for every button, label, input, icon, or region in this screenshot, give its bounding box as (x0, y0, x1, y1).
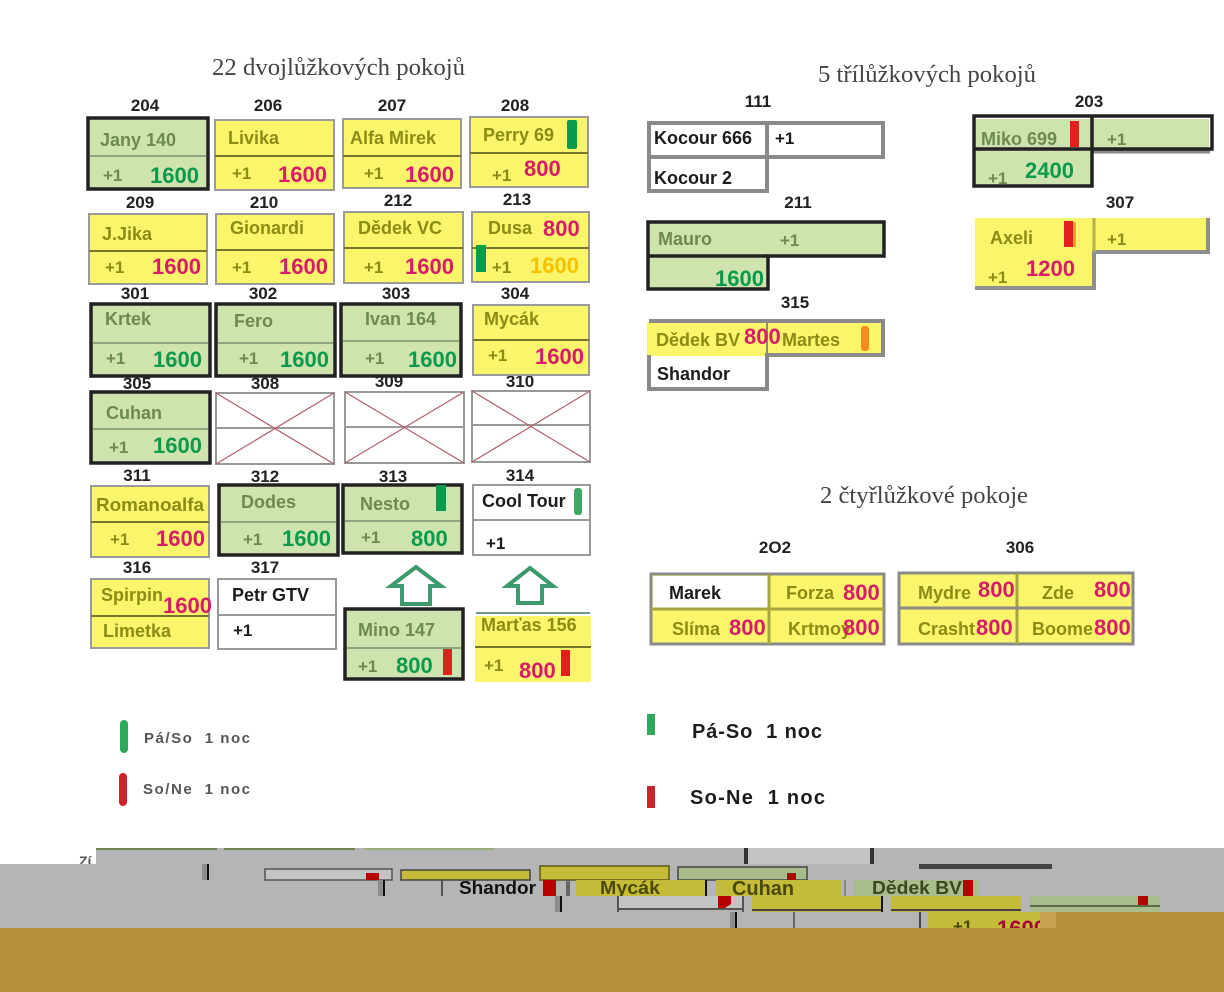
room numbers of triple rooms: 211 (784, 193, 812, 212)
room Mino 147: +1 (358, 657, 377, 676)
room 306: 800 (978, 577, 1015, 602)
legend: right: So-Ne 1 noc (690, 787, 825, 809)
room Marťas 156: +1 (484, 656, 503, 675)
title: 22 double rooms: 22 dvojlůžkových pokojů (212, 55, 465, 81)
fragment: strip row 3 with names: Cuhan (732, 878, 794, 900)
room 204: 1600 (150, 163, 199, 188)
room 311 (91, 486, 209, 557)
room 310 crossed out (472, 391, 590, 462)
fragment: strip row 4 (555, 896, 1160, 912)
room 307: +1 (988, 268, 1007, 287)
room 306: Crasht (918, 619, 975, 639)
room numbers of double rooms: 317 (251, 558, 279, 577)
room 204: +1 (103, 166, 122, 185)
room 301: +1 (106, 349, 125, 368)
room numbers of double rooms: 304 (501, 284, 530, 303)
room 111: Kocour 2 (654, 168, 732, 188)
room 306: Zde (1042, 583, 1074, 603)
room numbers of double rooms: 309 (375, 372, 403, 391)
room 306: 800 (976, 615, 1013, 640)
room 303: Ivan 164 (365, 309, 436, 329)
room 308 crossed out (216, 393, 334, 464)
room 213 (472, 212, 589, 282)
room 313 (343, 485, 462, 553)
legend: left (119, 720, 250, 806)
room numbers of double rooms: 303 (382, 284, 410, 303)
room 206: 1600 (278, 162, 327, 187)
fragment: strip row 5 (730, 912, 1040, 928)
room 203: 2400 (1025, 158, 1074, 183)
room 303 (341, 304, 461, 376)
room numbers of double rooms: 311 (123, 466, 151, 485)
title: 2 quadruple rooms: 2 čtyřlůžkové pokoje (820, 483, 1028, 509)
room 210: Gionardi (230, 218, 304, 238)
room 304: Mycák (484, 309, 540, 329)
room numbers of double rooms: 305 (123, 374, 151, 393)
room numbers of double rooms: 208 (501, 96, 529, 115)
room 316: Limetka (103, 621, 172, 641)
room Marťas 156: 800 (519, 658, 556, 683)
legend: left: So/Ne 1 noc (143, 781, 250, 798)
fragment: lighter gold patch (1040, 912, 1056, 928)
room 213: Dusa (488, 218, 533, 238)
room 305: 1600 (153, 433, 202, 458)
room numbers of triple rooms: 111 (745, 92, 771, 111)
room 304 (473, 305, 589, 375)
room numbers of double rooms: 212 (384, 191, 412, 210)
room 302: Fero (234, 311, 273, 331)
room 210: 1600 (279, 254, 328, 279)
room 202 (651, 574, 884, 644)
room 301: Krtek (105, 309, 152, 329)
arrow: Marťas up to 314 (507, 568, 553, 603)
room 307: Axeli (990, 228, 1033, 248)
room 213: +1 (492, 258, 511, 277)
room numbers of triple rooms: 315 (781, 293, 809, 312)
room numbers of double rooms: 302 (249, 284, 277, 303)
room 203: Miko 699 (981, 129, 1057, 149)
room 317: Petr GTV (232, 585, 309, 605)
room 209 (89, 214, 207, 284)
room 206: Livika (228, 128, 280, 148)
room 202: Slíma (672, 619, 721, 639)
room 211: +1 (780, 231, 799, 250)
legend: right: Pá-So 1 noc (692, 721, 822, 743)
band: gray footer strip with scrambled screenshot fragments (0, 848, 1224, 928)
room 202: 800 (729, 615, 766, 640)
room 312: +1 (243, 530, 262, 549)
room 203: +1 (1107, 130, 1126, 149)
room 211 (648, 222, 884, 291)
room 317 (218, 579, 336, 649)
room 204: Jany 140 (100, 130, 176, 150)
room numbers of quadruple rooms (759, 538, 1034, 557)
room 202: Marek (669, 583, 722, 603)
room 316 (91, 579, 212, 648)
room 207: 1600 (405, 162, 454, 187)
room 202: Forza (786, 583, 835, 603)
room 313: +1 (361, 528, 380, 547)
room 316: 1600 (163, 593, 212, 618)
band: gold footer (0, 912, 1224, 992)
room 202: Krtmoy (788, 619, 851, 639)
room 212: Dědek VC (358, 218, 442, 238)
room 111: Kocour 666 (654, 128, 752, 148)
room 203 (974, 116, 1212, 188)
room 302 (216, 304, 335, 376)
room numbers of quadruple rooms: 306 (1006, 538, 1034, 557)
room 305 (91, 392, 210, 463)
room 208: 800 (524, 156, 561, 181)
room 315: Dědek BV (656, 330, 740, 350)
room numbers of double rooms: 310 (506, 372, 534, 391)
room 305: +1 (109, 438, 128, 457)
room 208 (470, 117, 588, 187)
title: 5 triple rooms: 5 třílůžkových pokojů (818, 62, 1036, 88)
room Marťas 156: Marťas 156 (481, 615, 577, 635)
room 208: Perry 69 (483, 125, 554, 145)
fragment: strip row 5: +1 (953, 917, 972, 936)
room 111 (649, 123, 883, 191)
room 210 (216, 214, 334, 284)
room 306: 800 (1094, 615, 1131, 640)
arrow: Mino up to 313 (391, 567, 441, 604)
room 315: Shandor (657, 364, 730, 384)
room 315: Martes (782, 330, 840, 350)
room 315: 800 (744, 324, 781, 349)
legend: right (647, 714, 825, 809)
room 213: 1600 (530, 253, 579, 278)
room numbers of triple rooms (745, 92, 1134, 312)
room 314: +1 (486, 534, 505, 553)
room numbers of quadruple rooms: 2O2 (759, 538, 791, 557)
room numbers of double rooms: 207 (378, 96, 406, 115)
room 212 (344, 212, 463, 283)
room 317: +1 (233, 621, 252, 640)
room 302: 1600 (280, 347, 329, 372)
room numbers of double rooms: 210 (250, 193, 278, 212)
room 211: Mauro (658, 229, 712, 249)
room 206 (215, 120, 334, 190)
room numbers of triple rooms: 307 (1106, 193, 1134, 212)
room numbers of double rooms: 312 (251, 467, 279, 486)
room 206: +1 (232, 164, 251, 183)
room 207 (343, 119, 461, 188)
room 306: Mydre (918, 583, 971, 603)
room 301 (91, 304, 210, 376)
room 306: Boome (1032, 619, 1093, 639)
room 307 (975, 218, 1208, 288)
legend: left: Pá/So 1 noc (144, 730, 250, 747)
fragment: strip row 5: 1600 (997, 916, 1046, 941)
room numbers of double rooms: 213 (503, 190, 531, 209)
text fragment above footer: Zí (79, 853, 93, 869)
room 314: Cool Tour (482, 491, 566, 511)
room Mino 147: Mino 147 (358, 620, 435, 640)
room 301: 1600 (153, 347, 202, 372)
room 208: +1 (492, 166, 511, 185)
room numbers of double rooms (121, 96, 535, 577)
room 307: 1200 (1026, 256, 1075, 281)
room Mino 147: 800 (396, 653, 433, 678)
room 309 crossed out (345, 392, 464, 463)
room 307: +1 (1107, 230, 1126, 249)
room 211: 1600 (715, 266, 764, 291)
room 306 (899, 573, 1133, 644)
room 210: +1 (232, 258, 251, 277)
room 312: 1600 (282, 526, 331, 551)
room numbers of double rooms: 316 (123, 558, 151, 577)
room numbers of double rooms: 204 (131, 96, 160, 115)
room 302: +1 (239, 349, 258, 368)
room 202: 800 (843, 615, 880, 640)
fragment: strip row 3 with names (378, 880, 979, 896)
room 202: 800 (843, 580, 880, 605)
room 111: +1 (775, 129, 794, 148)
panel: double rooms (88, 96, 591, 683)
room 313: 800 (411, 526, 448, 551)
room 212: 1600 (405, 254, 454, 279)
room 204 (88, 118, 208, 189)
room 304: +1 (488, 346, 507, 365)
room 316: Spirpin (101, 585, 163, 605)
room 312: Dodes (241, 492, 296, 512)
room numbers of double rooms: 314 (506, 466, 535, 485)
room 313: Nesto (360, 494, 410, 514)
room 209: +1 (105, 258, 124, 277)
room Marťas 156 (475, 613, 591, 683)
room numbers of triple rooms: 203 (1075, 92, 1103, 111)
room 209: 1600 (152, 254, 201, 279)
room 315 (647, 321, 883, 390)
room 314 (473, 485, 590, 555)
room 303: +1 (365, 349, 384, 368)
room 203: +1 (988, 169, 1007, 188)
room 303: 1600 (408, 347, 457, 372)
fragment: strip row 3 with names: Shandor (459, 878, 536, 898)
room 311: +1 (110, 530, 129, 549)
room 209: J.Jika (102, 224, 153, 244)
room numbers of double rooms: 308 (251, 374, 279, 393)
room 212: +1 (364, 258, 383, 277)
room 305: Cuhan (106, 403, 162, 423)
fragment: strip row 3 with names: Dědek BV (872, 878, 962, 898)
room numbers of double rooms: 209 (126, 193, 154, 212)
room 213: 800 (543, 216, 580, 241)
room 207: Alfa Mirek (350, 128, 437, 148)
room Mino 147 (345, 609, 463, 679)
room 306: 800 (1094, 577, 1131, 602)
room 207: +1 (364, 164, 383, 183)
room 312 (219, 485, 338, 555)
room numbers of double rooms: 301 (121, 284, 149, 303)
fragment: strip row 2 (202, 864, 1052, 880)
room numbers of double rooms: 313 (379, 467, 407, 486)
fragment: strip row 3 with names: Mycák (600, 878, 661, 898)
room 304: 1600 (535, 344, 584, 369)
room numbers of double rooms: 206 (254, 96, 282, 115)
room 311: Romanoalfa (96, 495, 205, 515)
room 311: 1600 (156, 526, 205, 551)
